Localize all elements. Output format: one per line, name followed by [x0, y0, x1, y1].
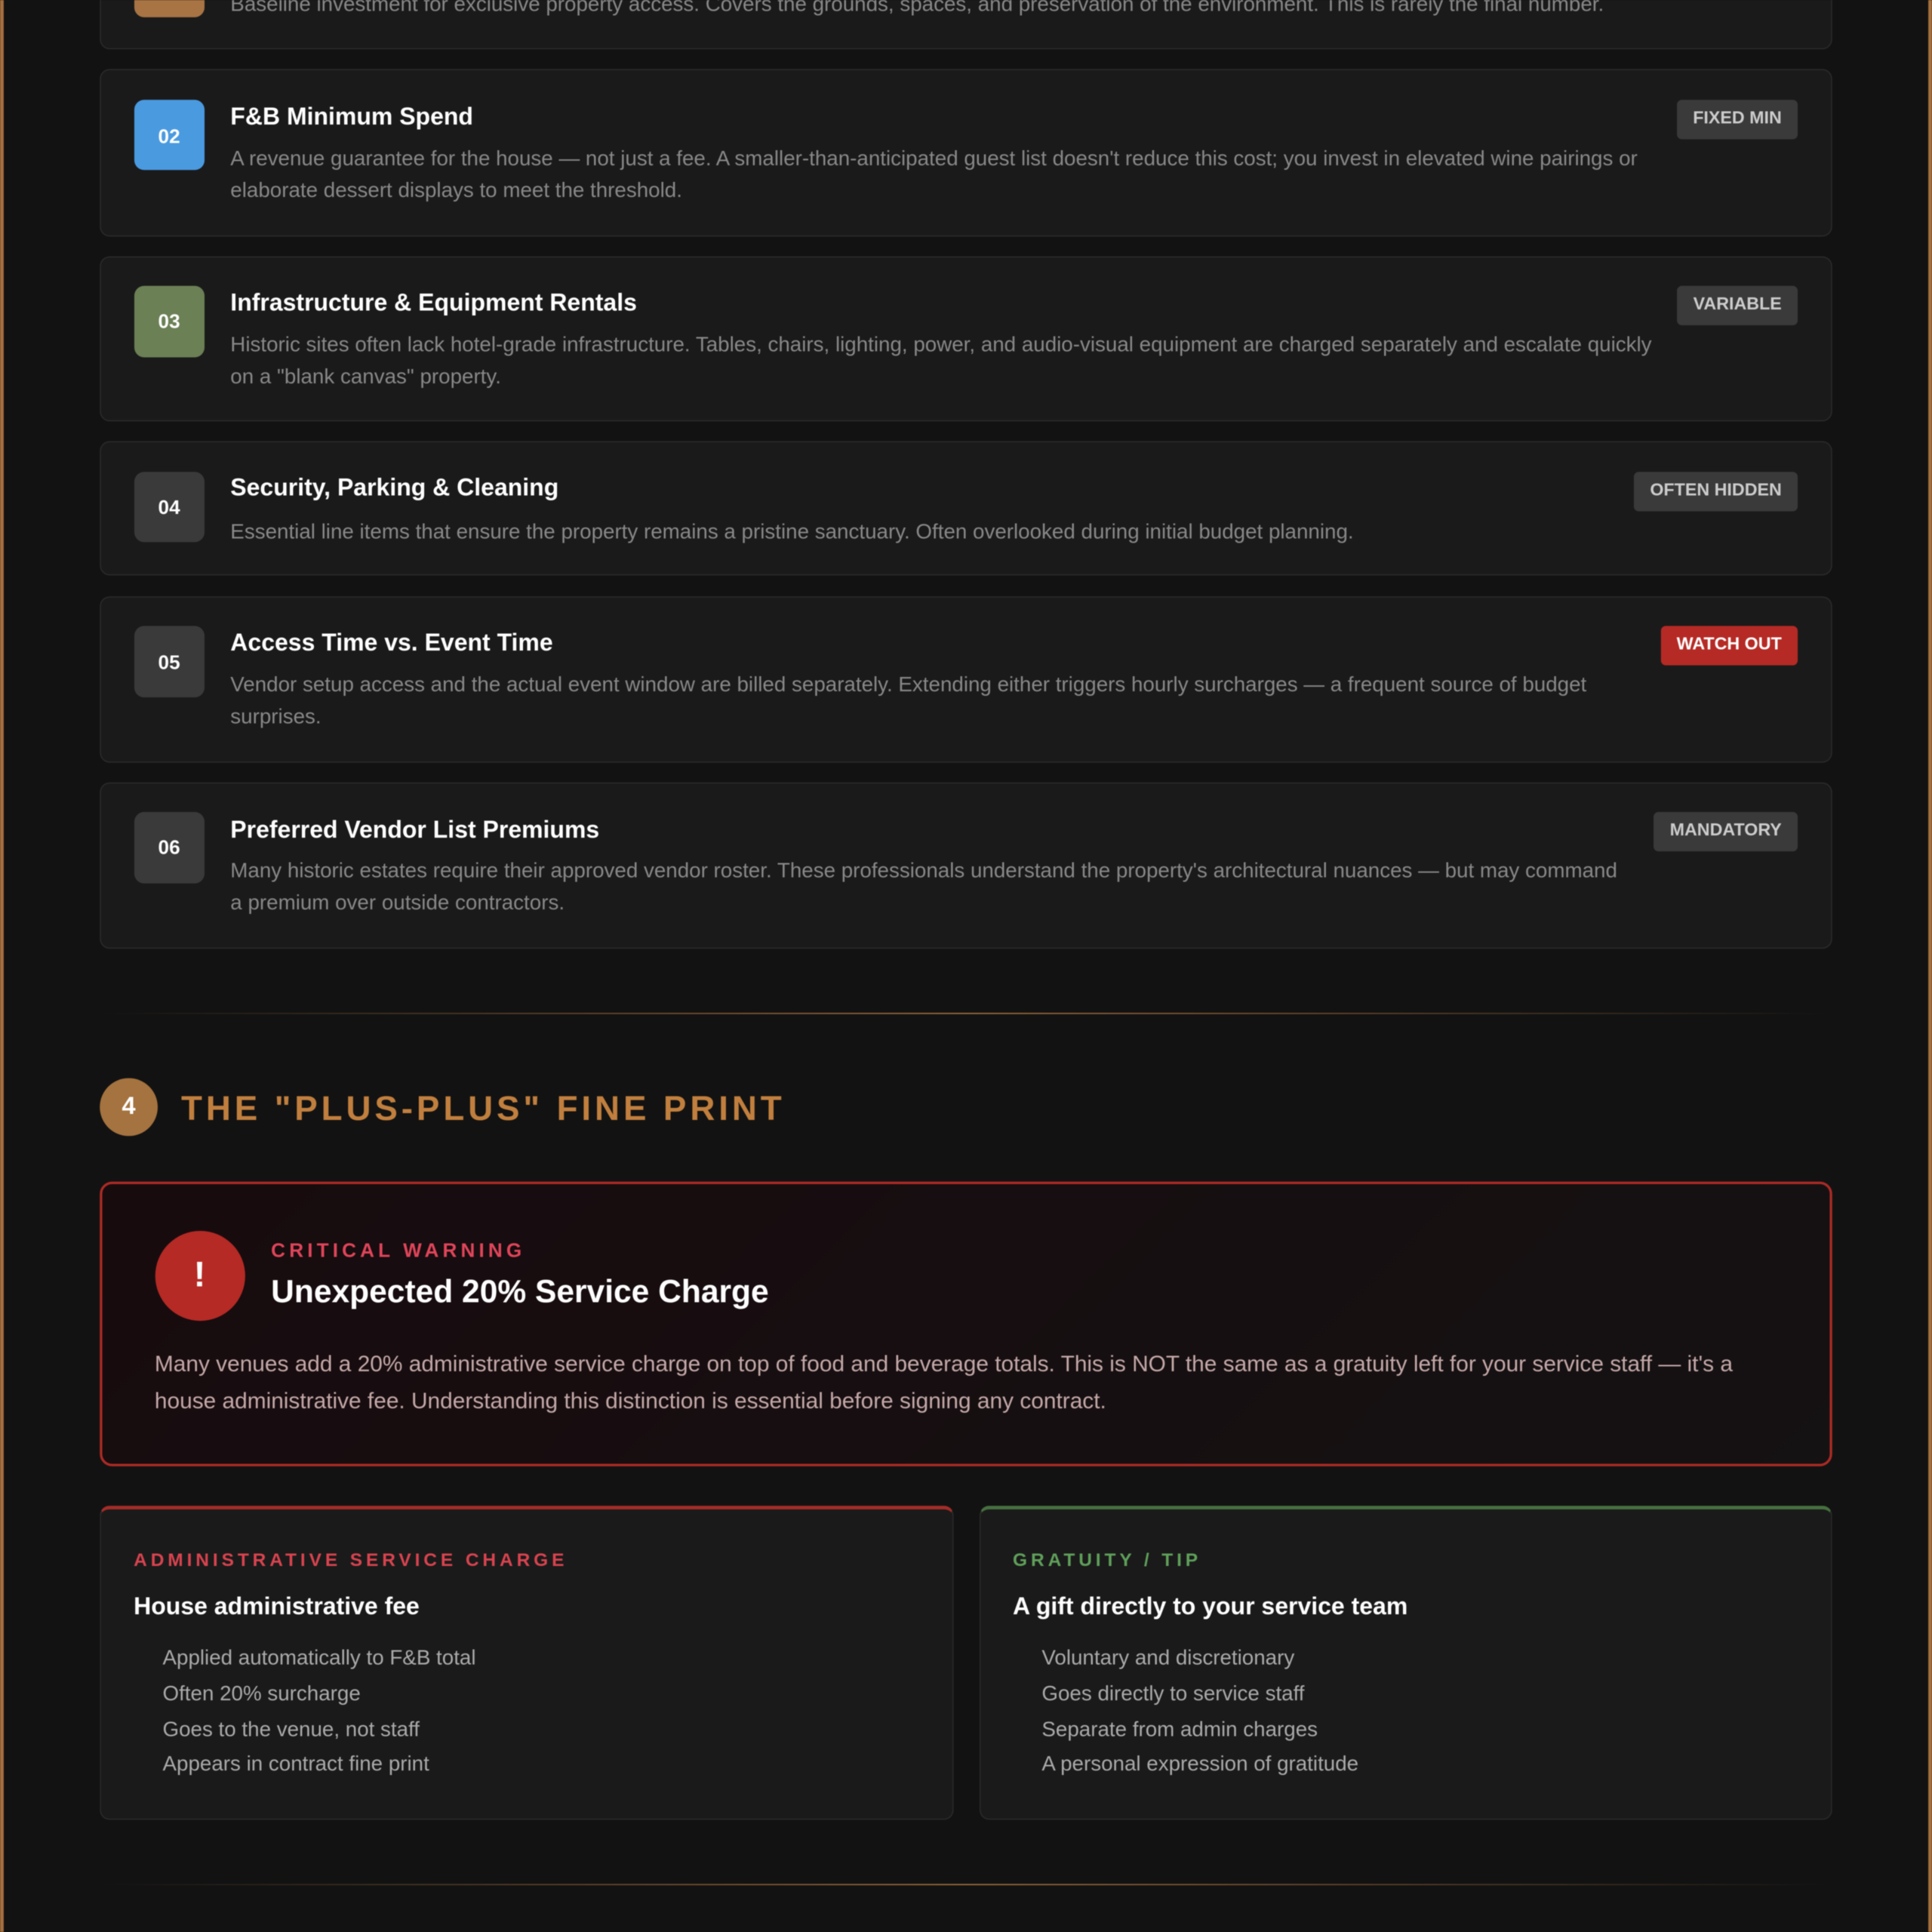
list item: Goes to the venue, not staff — [163, 1717, 420, 1740]
section title: THE "PLUS-PLUS" FINE PRINT — [181, 1089, 786, 1128]
description 04: Essential line items that ensure the property remains a pristine sanctuary. Often overlooked during initial budget planning. — [230, 520, 1354, 543]
description 03 — [230, 333, 1652, 389]
warning title: Unexpected 20% Service Charge — [271, 1273, 769, 1310]
tag: fixed min — [1677, 100, 1798, 139]
subtitle: A gift directly to your service team — [1013, 1593, 1407, 1620]
badge 05 — [134, 626, 205, 697]
badge 05: 05 — [158, 654, 180, 675]
title 03: Infrastructure & Equipment Rentals — [230, 290, 637, 317]
title 04: Security, Parking & Cleaning — [230, 475, 558, 502]
card 06: preferred vendor list premiums — [100, 782, 1832, 949]
critical warning panel — [100, 1182, 1832, 1466]
badge 04: 04 — [158, 497, 180, 518]
description 06: a premium over outside contractors. — [230, 891, 565, 915]
badge 04 — [134, 472, 205, 543]
badge 06 — [134, 812, 205, 883]
list item: Goes directly to service staff — [1041, 1682, 1305, 1706]
card 01: venue rental fee — [100, 0, 1832, 49]
tag: variable — [1677, 286, 1798, 325]
tag: mandatory — [1654, 812, 1798, 852]
tag: often hidden — [1634, 472, 1798, 511]
list item: Voluntary and discretionary — [1041, 1646, 1294, 1669]
warning icon: ! — [194, 1255, 205, 1294]
description 06 — [230, 860, 1617, 915]
description 02: elaborate dessert displays to meet the threshold. — [230, 179, 682, 202]
label: GRATUITY / TIP — [1013, 1550, 1201, 1571]
badge 06: 06 — [158, 838, 180, 859]
badge 01 — [134, 0, 205, 17]
tag: watch out — [1660, 626, 1798, 666]
tag: often hidden: OFTEN HIDDEN — [1650, 480, 1782, 500]
description 05 — [230, 673, 1586, 729]
card 03: infrastructure and equipment rentals — [100, 256, 1832, 421]
list item: Applied automatically to F&B total — [163, 1646, 476, 1669]
warning body: house administrative fee. Understanding this distinction is essential before signing any contract. — [155, 1387, 1106, 1414]
tag: watch out: WATCH OUT — [1677, 635, 1782, 654]
section number circle: 4 — [122, 1093, 136, 1120]
badge 03 — [134, 286, 205, 357]
badge 03: 03 — [158, 312, 180, 333]
card 05: access time vs event time — [100, 596, 1832, 762]
section number circle — [100, 1078, 158, 1136]
subtitle: House administrative fee — [134, 1593, 420, 1620]
tag: fixed min: FIXED MIN — [1693, 108, 1782, 128]
list item: Separate from admin charges — [1041, 1717, 1318, 1740]
description 03: Historic sites often lack hotel-grade infrastructure. Tables, chairs, lighting, power, and audio-visual equipment are charged separately and escalate quickly — [230, 333, 1652, 356]
description 02: A revenue guarantee for the house — not just a fee. A smaller-than-anticipated guest list doesn't reduce this cost; you invest in elevated wine pairings or — [230, 147, 1638, 171]
warning icon — [155, 1230, 245, 1320]
title 02: F&B Minimum Spend — [230, 103, 473, 131]
section 4 heading — [100, 1078, 786, 1137]
comparison card: gratuity — [979, 1506, 1832, 1820]
warning label: CRITICAL WARNING — [271, 1241, 525, 1262]
description 02 — [230, 147, 1638, 202]
comparison card: administrative service charge — [100, 1506, 953, 1820]
warning body: Many venues add a 20% administrative service charge on top of food and beverage totals. This is NOT the same as a gratuity left for your service staff — it's a — [155, 1350, 1733, 1377]
tag: mandatory: MANDATORY — [1670, 821, 1782, 841]
description 06: Many historic estates require their approved vendor roster. These professionals understand the property's architectural nuances — but may command — [230, 860, 1617, 883]
description 05: Vendor setup access and the actual event window are billed separately. Extending either triggers hourly surcharges — a frequent source of budget — [230, 673, 1586, 697]
card 04: security, parking and cleaning — [100, 441, 1832, 576]
description 03: on a "blank canvas" property. — [230, 365, 501, 388]
list item: Appears in contract fine print — [163, 1752, 429, 1776]
list item: Often 20% surcharge — [163, 1682, 361, 1706]
label: ADMINISTRATIVE SERVICE CHARGE — [134, 1550, 568, 1571]
title 05: Access Time vs. Event Time — [230, 629, 553, 657]
badge 02: 02 — [158, 127, 180, 148]
description 05: surprises. — [230, 705, 321, 728]
warning body — [155, 1350, 1734, 1414]
tag: variable: VARIABLE — [1694, 295, 1782, 315]
card 02: F&B minimum spend — [100, 69, 1832, 236]
badge 02 — [134, 100, 205, 171]
title 06: Preferred Vendor List Premiums — [230, 817, 599, 844]
list item: A personal expression of gratitude — [1041, 1752, 1358, 1776]
